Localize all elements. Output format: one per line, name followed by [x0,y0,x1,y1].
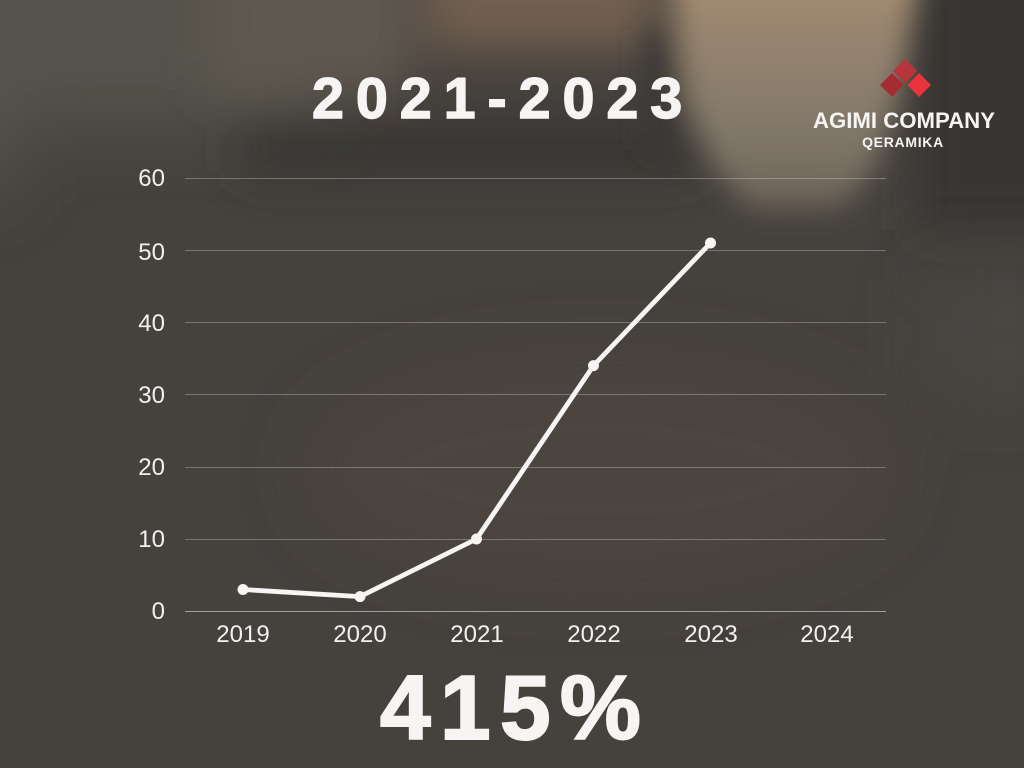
y axis labels: 20 [138,454,165,481]
logo: Agimi Company Qeramika [813,59,995,150]
icon: red diamonds [880,59,931,97]
x axis labels: 2019 [216,621,270,648]
x axis labels [216,621,854,648]
x axis labels: 2020 [333,621,387,648]
x axis labels: 2023 [684,621,738,648]
company name: AGIMI COMPANY [813,108,995,133]
x axis labels: 2021 [450,621,504,648]
y axis labels: 40 [138,310,165,337]
y axis labels: 10 [138,526,165,553]
y axis labels: 0 [152,598,165,625]
x axis labels: 2024 [800,621,854,648]
y axis labels: 50 [138,239,165,266]
data line [238,238,716,602]
y axis labels: 30 [138,382,165,409]
company subtitle: QERAMIKA [862,134,944,150]
title: 2021-2023 [312,67,694,131]
x axis labels: 2022 [567,621,621,648]
headline percentage: 415% [380,658,650,759]
y axis labels: 60 [138,165,165,192]
y axis labels [138,165,165,625]
